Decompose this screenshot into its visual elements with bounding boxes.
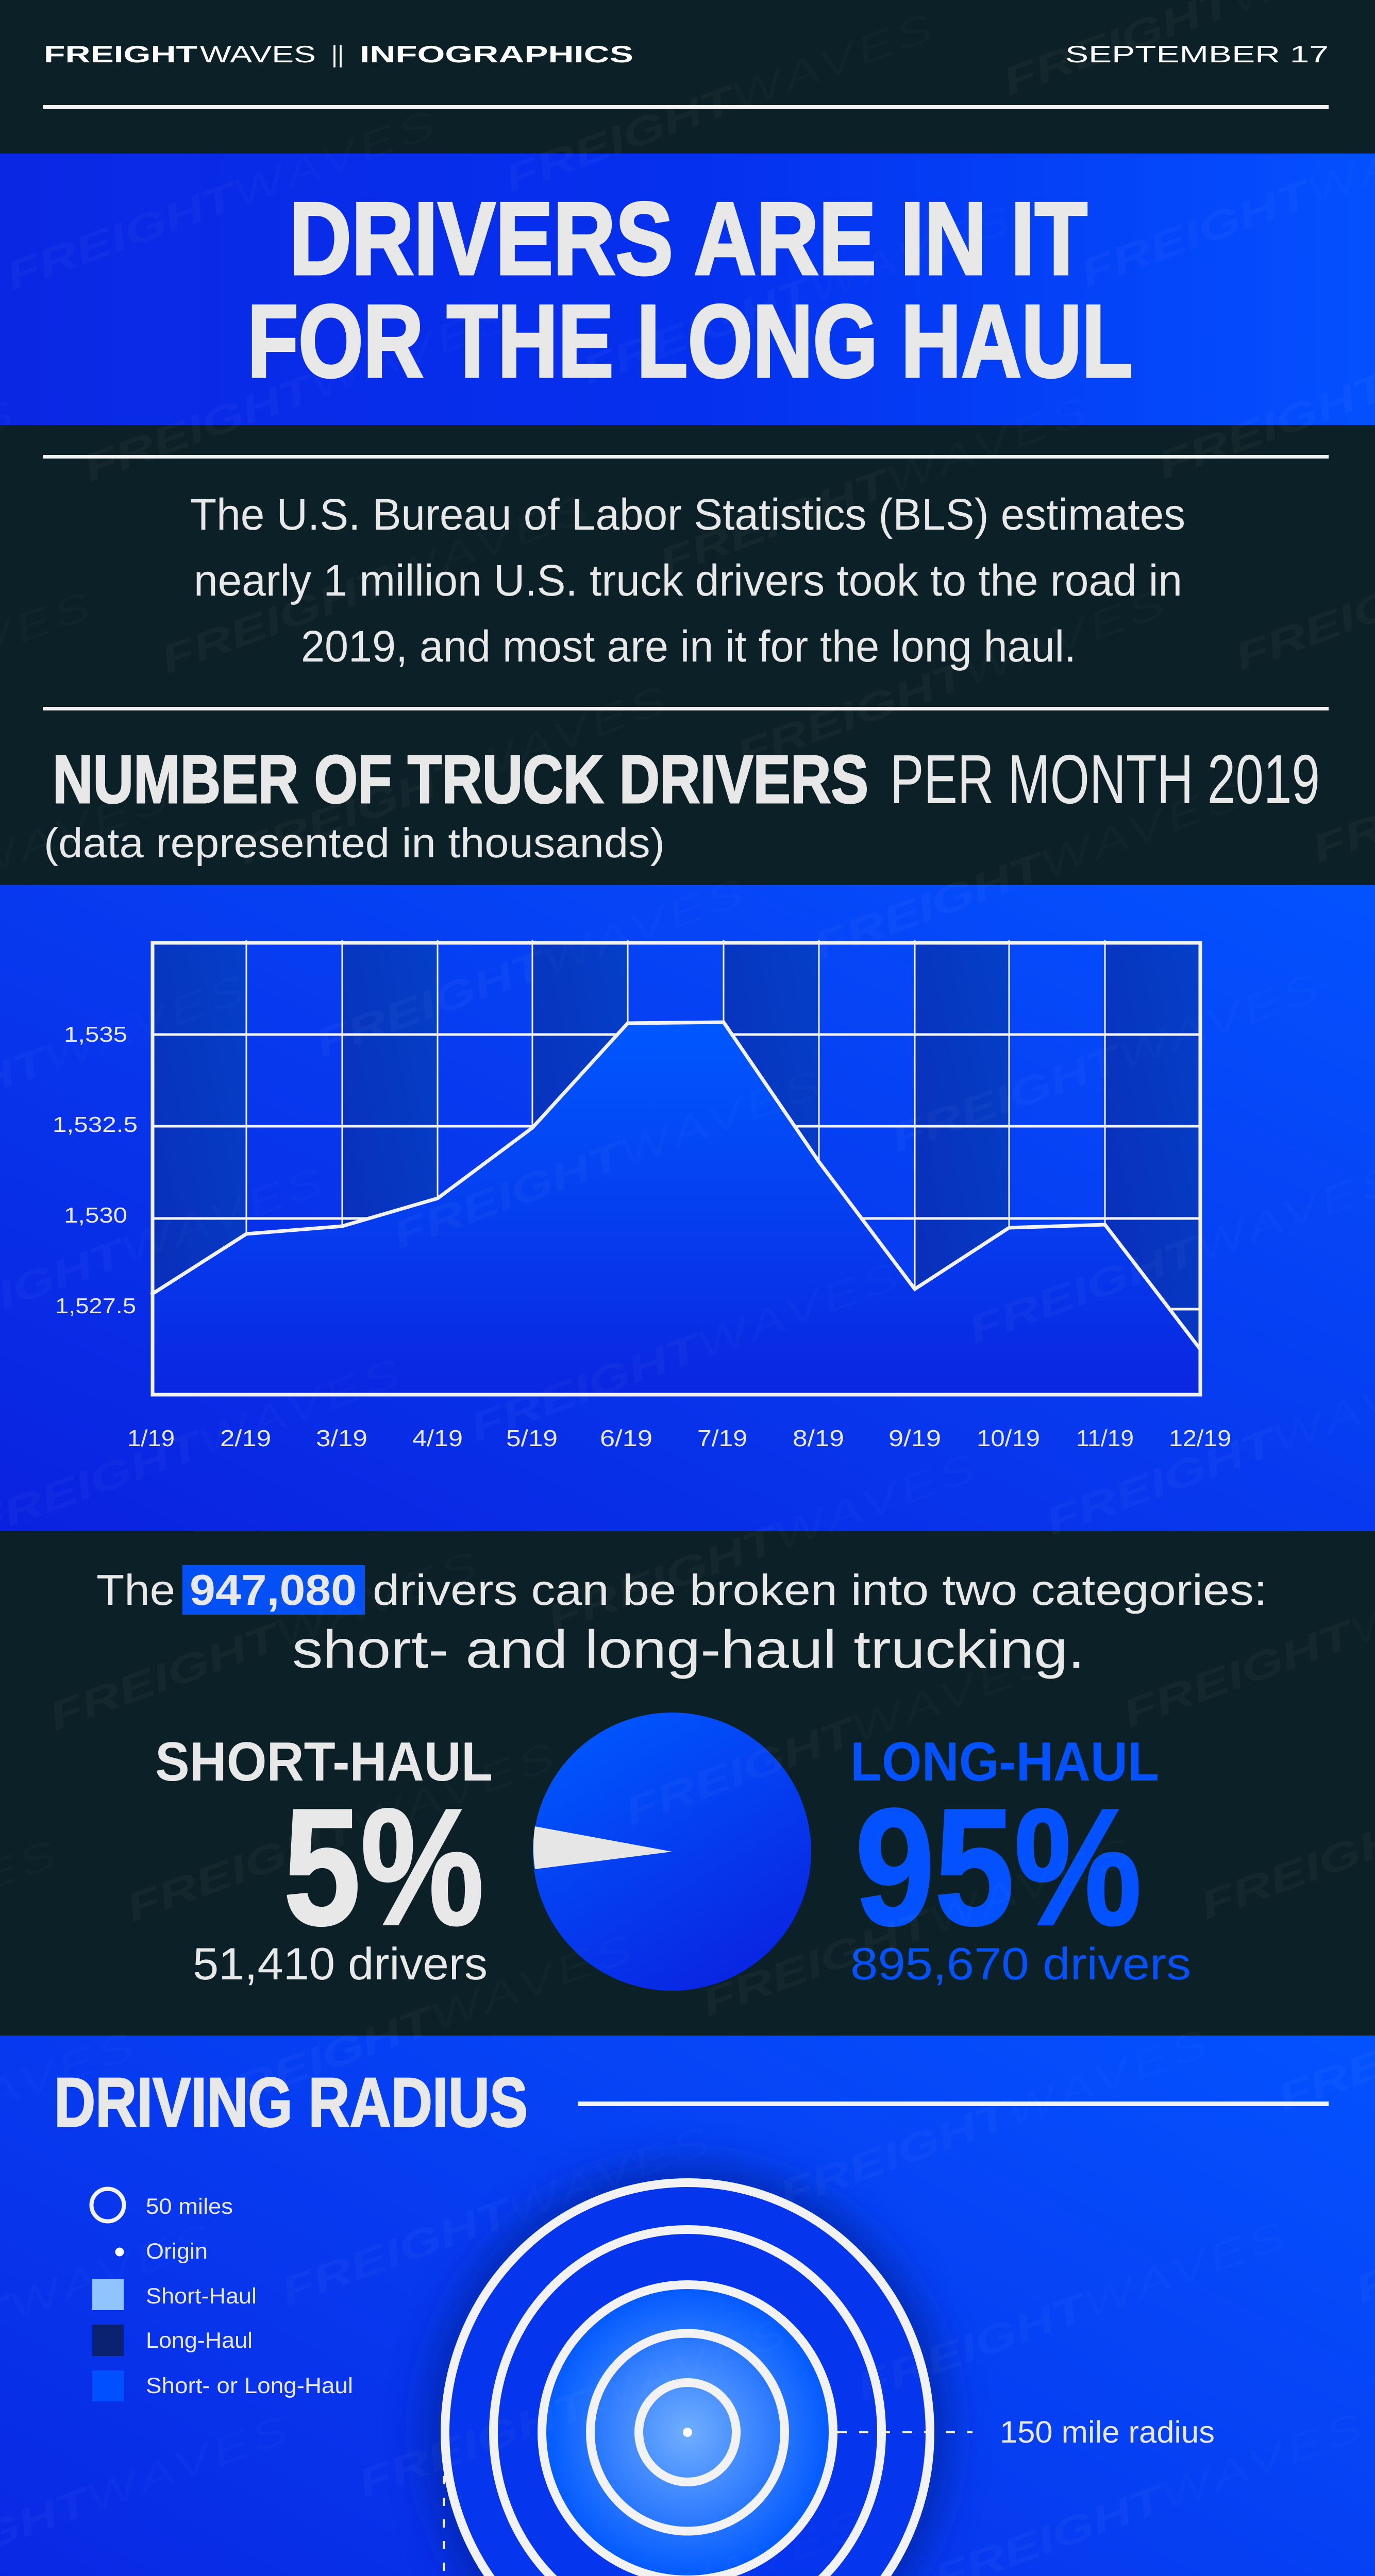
watermark pattern: FREIGHTWAVES bbox=[1, 101, 444, 298]
header bar: FREIGHT bbox=[44, 41, 197, 67]
categories intro text: The bbox=[96, 1566, 175, 1614]
x axis labels: 1/19 bbox=[127, 1425, 175, 1451]
short-haul stat bbox=[155, 1731, 493, 1989]
watermark pattern: FREIGHTWAVES bbox=[774, 2020, 1217, 2217]
x axis labels: 3/19 bbox=[316, 1425, 367, 1451]
watermark pattern: FREIGHTWAVES bbox=[198, 1925, 642, 2122]
watermark pattern: FREIGHTWAVES bbox=[731, 580, 1175, 777]
x axis labels: 10/19 bbox=[977, 1425, 1040, 1451]
area series bbox=[151, 1022, 1200, 1395]
legend: 50 miles bbox=[146, 2194, 233, 2219]
watermark pattern: FREIGHTWAVES bbox=[696, 1828, 1140, 2025]
watermark pattern: FREIGHTWAVES bbox=[310, 869, 753, 1066]
watermark pattern: FREIGHTWAVES bbox=[619, 1636, 1063, 1834]
pie chart bbox=[533, 1713, 811, 1991]
watermark pattern: FREIGHTWAVES bbox=[576, 196, 1020, 393]
x axis labels: 2/19 bbox=[220, 1425, 271, 1451]
intro text: nearly 1 million U.S. truck drivers took to the road in bbox=[194, 556, 1182, 605]
legend: Short-Haul bbox=[146, 2284, 257, 2309]
heading: number of truck drivers: NUMBER OF TRUCK DRIVERS bbox=[53, 741, 868, 817]
watermark pattern: FREIGHTWAVES bbox=[232, 676, 676, 874]
header bar: || bbox=[331, 41, 344, 67]
categories intro text bbox=[96, 1565, 1267, 1680]
heading: number of truck drivers bbox=[44, 740, 1320, 867]
watermark pattern: FREIGHTWAVES bbox=[885, 963, 1329, 1161]
watermark pattern: FREIGHTWAVES bbox=[653, 387, 1097, 585]
y axis labels: 1,530 bbox=[64, 1203, 127, 1227]
categories intro text: drivers can be broken into two categories: bbox=[373, 1566, 1267, 1614]
y axis labels: 1,527.5 bbox=[55, 1294, 136, 1318]
x axis labels: 4/19 bbox=[412, 1425, 463, 1451]
panel: driving radius bbox=[0, 2036, 1375, 2576]
title banner: FOR THE LONG HAUL bbox=[247, 284, 1133, 399]
watermark pattern: FREIGHTWAVES bbox=[499, 4, 943, 201]
watermark pattern: FREIGHTWAVES bbox=[155, 485, 599, 682]
x axis labels: 9/19 bbox=[888, 1425, 941, 1451]
watermark pattern: FREIGHTWAVES bbox=[464, 1252, 908, 1450]
long-haul stat bbox=[850, 1731, 1191, 1989]
header bar: INFOGRAPHICS bbox=[360, 41, 633, 67]
watermark pattern: FREIGHTWAVES bbox=[121, 1733, 564, 1930]
short-haul stat: 5% bbox=[283, 1775, 484, 1960]
heading: number of truck drivers: (data represented in thousands) bbox=[44, 820, 665, 867]
short-haul stat: 51,410 drivers bbox=[193, 1938, 488, 1989]
watermark pattern: FREIGHTWAVES bbox=[43, 1541, 487, 1739]
header bar: SEPTEMBER 17 bbox=[1065, 41, 1329, 67]
long-haul stat: LONG-HAUL bbox=[850, 1731, 1159, 1792]
heading: driving radius: DRIVING RADIUS bbox=[54, 2063, 528, 2141]
header bar: WAVES bbox=[200, 41, 316, 67]
intro text bbox=[43, 455, 1329, 710]
legend: Long-Haul bbox=[146, 2328, 253, 2353]
x axis labels: 12/19 bbox=[1169, 1425, 1231, 1451]
legend bbox=[92, 2189, 353, 2401]
x axis labels: 8/19 bbox=[793, 1425, 844, 1451]
chart frame bbox=[153, 943, 1200, 1395]
categories intro text: short- and long-haul trucking. bbox=[292, 1620, 1085, 1680]
callout: 150 mile radius: 150 mile radius bbox=[1000, 2415, 1215, 2449]
watermark pattern: FREIGHTWAVES bbox=[387, 1060, 831, 1258]
watermark pattern: FREIGHTWAVES bbox=[542, 1444, 985, 1641]
panel: line chart bbox=[0, 885, 1375, 1531]
short-haul stat: SHORT-HAUL bbox=[155, 1731, 493, 1792]
y axis labels: 1,532.5 bbox=[53, 1112, 138, 1137]
y axis labels: 1,535 bbox=[64, 1022, 127, 1046]
intro text: 2019, and most are in it for the long haul. bbox=[301, 622, 1076, 671]
x axis labels: 7/19 bbox=[697, 1425, 747, 1451]
watermark pattern: FREIGHTWAVES bbox=[808, 771, 1252, 969]
watermark pattern: FREIGHTWAVES bbox=[851, 2212, 1295, 2409]
x axis labels: 6/19 bbox=[600, 1425, 652, 1451]
long-haul stat: 95% bbox=[855, 1775, 1142, 1960]
watermark pattern: FREIGHTWAVES bbox=[275, 2117, 719, 2314]
intro text: The U.S. Bureau of Labor Statistics (BLS) estimates bbox=[190, 490, 1185, 539]
chart columns bbox=[151, 941, 1201, 1395]
long-haul stat: 895,670 drivers bbox=[850, 1938, 1191, 1989]
categories intro text: 947,080 bbox=[190, 1566, 357, 1614]
y axis labels bbox=[53, 1022, 138, 1318]
watermark pattern: FREIGHTWAVES bbox=[78, 293, 522, 490]
legend: Origin bbox=[146, 2239, 208, 2264]
x axis labels: 5/19 bbox=[506, 1425, 558, 1451]
header bar bbox=[43, 41, 1329, 109]
x axis labels bbox=[127, 1425, 1231, 1451]
radius rings bbox=[430, 2167, 945, 2576]
title banner bbox=[0, 154, 1375, 425]
watermark pattern: FREIGHTWAVES bbox=[353, 2309, 796, 2506]
callout: 250+ mile radius bbox=[327, 2476, 566, 2576]
x axis labels: 11/19 bbox=[1076, 1425, 1134, 1451]
legend: Short- or Long-Haul bbox=[146, 2374, 353, 2398]
title banner: DRIVERS ARE IN IT bbox=[289, 181, 1087, 296]
